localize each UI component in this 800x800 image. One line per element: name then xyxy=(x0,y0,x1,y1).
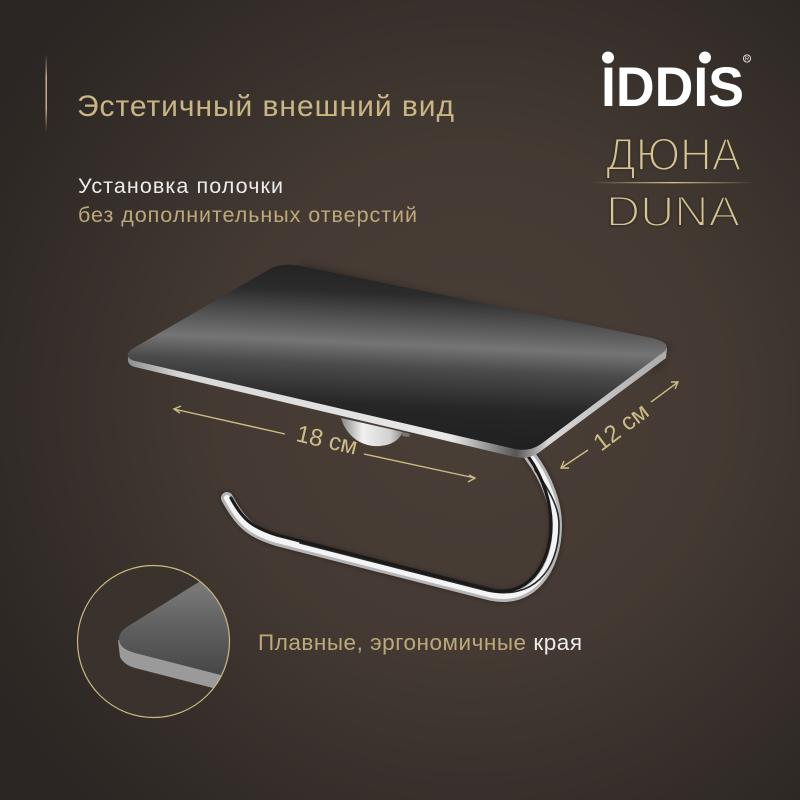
dimension: 12 cm: 12 см xyxy=(588,398,654,457)
detail surface xyxy=(119,582,229,675)
logo: iddis: IDDIS xyxy=(601,55,744,118)
decorative vertical line xyxy=(46,54,47,132)
shelf top xyxy=(128,265,667,450)
shelf edge xyxy=(128,348,667,458)
text block: installation: Установка полочки xyxy=(78,174,283,198)
divider xyxy=(590,182,755,183)
shadow xyxy=(300,262,672,372)
dimension: 18 cm: 18 см xyxy=(294,420,360,461)
wall mount xyxy=(341,418,403,446)
detail edge xyxy=(118,640,221,688)
heading: Эстетичный внешний вид xyxy=(77,90,454,123)
text block: installation: без дополнительных отверстий xyxy=(78,203,417,227)
dimension: 18 cm xyxy=(174,406,475,482)
callout: edge detail circle xyxy=(78,566,240,718)
dimension: 12 cm xyxy=(561,382,678,468)
text block: installation xyxy=(78,174,417,227)
caption: smooth edges: Плавные, эргономичные края xyxy=(258,630,582,655)
series name: cyrillic: ДЮНА xyxy=(606,129,741,180)
logo: iddis: R xyxy=(745,56,749,62)
rod xyxy=(227,456,559,596)
product: toilet paper holder with shelf xyxy=(128,262,672,596)
series name: latin: DUNA xyxy=(606,188,740,236)
